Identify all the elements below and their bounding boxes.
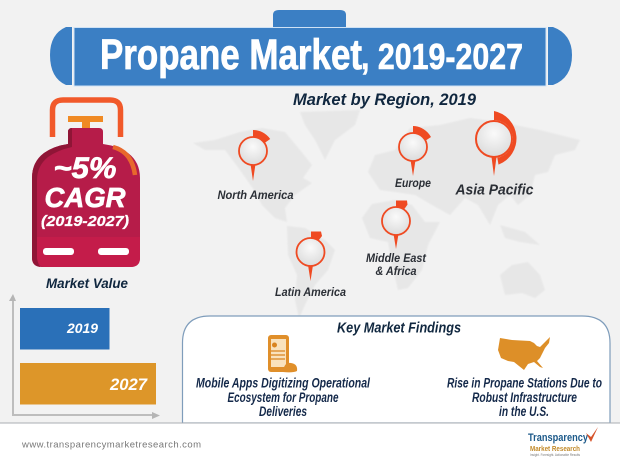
logo: Transparency Market Research [528,427,598,457]
footer band [0,423,620,460]
panel: key market findings [182,316,610,423]
bar 2027 label: 2027 [109,375,149,394]
pin: Europe [399,126,431,176]
cylinder base dashes [43,248,129,255]
map: Africa [362,200,440,290]
map: Eurasia [368,118,580,225]
label: Asia Pacific: Asia Pacific [455,182,534,198]
title text: Propane Market [100,31,362,79]
icon: mobile phone [268,335,297,372]
axis arrow right [152,412,160,419]
finding text: mobile apps: Deliveries [259,404,307,419]
finding text: mobile apps: Mobile Apps Digitizing Operational [196,376,370,390]
footer rule [0,422,620,424]
heading: market by region: Market by Region, 2019 [293,91,477,109]
axis arrow up [9,294,16,301]
label: Middle East and Africa: Middle East [366,253,427,265]
finding text: propane stations: Robust Infrastructure [472,390,577,405]
cylinder bottom band [37,237,140,267]
panel heading: Key Market Findings [337,320,461,336]
bar 2019 [20,308,110,350]
cylinder valve [68,116,103,128]
label: Middle East and Africa: & Africa [376,266,417,278]
footer website: www.transparencymarketresearch.com [21,440,201,450]
CAGR years: (2019-2027) [41,213,129,230]
logo check mark [586,427,598,442]
label: Europe: Europe [395,178,432,190]
market value label: Market Value [46,275,128,291]
map: South-East Asia islands [500,225,540,245]
cylinder title banner [50,10,572,86]
cylinder highlight arc [113,147,135,175]
banner right cap [548,27,572,85]
title years: , 2019-2027 [361,36,523,77]
label: Latin America: Latin America [275,287,347,299]
world map background [193,110,580,318]
logo wordmark: Transparency [528,432,589,444]
finding text: propane stations: in the U.S. [499,404,549,419]
finding text: mobile apps: Ecosystem for Propane [228,390,339,405]
icon: USA map [498,337,550,370]
panel frame [182,316,610,423]
map: Australia [500,262,545,298]
cylinder body [32,128,140,267]
cylinder handle [52,100,120,137]
pin: North America [239,130,270,181]
logo tagline: Insight. Foresight. Actionable Results [530,453,580,457]
logo subtitle: Market Research [530,446,580,453]
banner left cap [50,27,72,85]
bar 2027 [20,363,156,404]
pin: Latin America [296,232,324,281]
banner top tab [273,10,346,27]
CAGR label: CAGR [44,182,126,213]
banner body [74,28,546,86]
pin: Asia Pacific [476,111,516,176]
pin: Middle East and Africa [382,200,410,249]
bar chart [9,294,160,419]
map: South America [287,226,335,318]
CAGR value: ~5% [54,152,116,185]
gas cylinder CAGR [32,100,140,267]
cylinder left shadow [32,128,72,267]
chart axes [13,298,156,415]
bar 2019 label: 2019 [66,320,98,336]
map: North America [193,128,312,222]
label: North America: North America [218,190,294,202]
map: Greenland [300,110,360,160]
